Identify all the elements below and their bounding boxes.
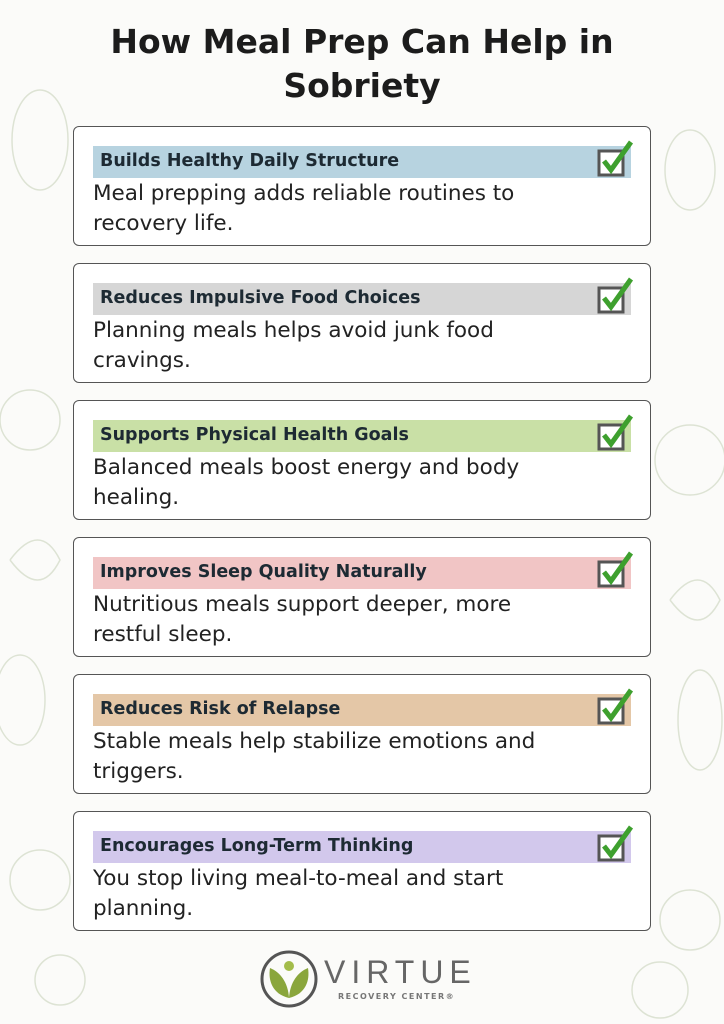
card: long-term: You stop living meal-to-meal and start planning. (93, 866, 503, 921)
card: impulsive: Planning meals helps avoid junk food cravings. (93, 318, 494, 373)
text: brand: VIRTUE (324, 954, 477, 990)
icon: logo mark (260, 950, 318, 1008)
title: Sobriety (283, 66, 441, 105)
logo (260, 950, 477, 1008)
card: physical (73, 400, 651, 520)
card: physical: Balanced meals boost energy and body healing. (93, 455, 519, 510)
card: long-term: Encourages Long-Term Thinking (100, 836, 413, 856)
card: relapse (73, 674, 651, 794)
card: sleep: Nutritious meals support deeper, more restful sleep. (93, 592, 511, 647)
card: structure: Builds Healthy Daily Structure (100, 151, 399, 171)
card: sleep: Improves Sleep Quality Naturally (100, 562, 427, 582)
card: impulsive: Reduces Impulsive Food Choices (100, 288, 420, 308)
title (110, 22, 614, 105)
logo: RECOVERY CENTER® (338, 992, 455, 1001)
card: long-term (73, 811, 651, 931)
card: structure (73, 126, 651, 246)
card: physical: Supports Physical Health Goals (100, 425, 409, 445)
card: relapse: Reduces Risk of Relapse (100, 699, 340, 719)
card: relapse: Stable meals help stabilize emotions and triggers. (93, 729, 535, 784)
card: sleep (73, 537, 651, 657)
card: impulsive (73, 263, 651, 383)
title: How Meal Prep Can Help in (110, 22, 614, 61)
card: structure: Meal prepping adds reliable routines to recovery life. (93, 181, 514, 236)
